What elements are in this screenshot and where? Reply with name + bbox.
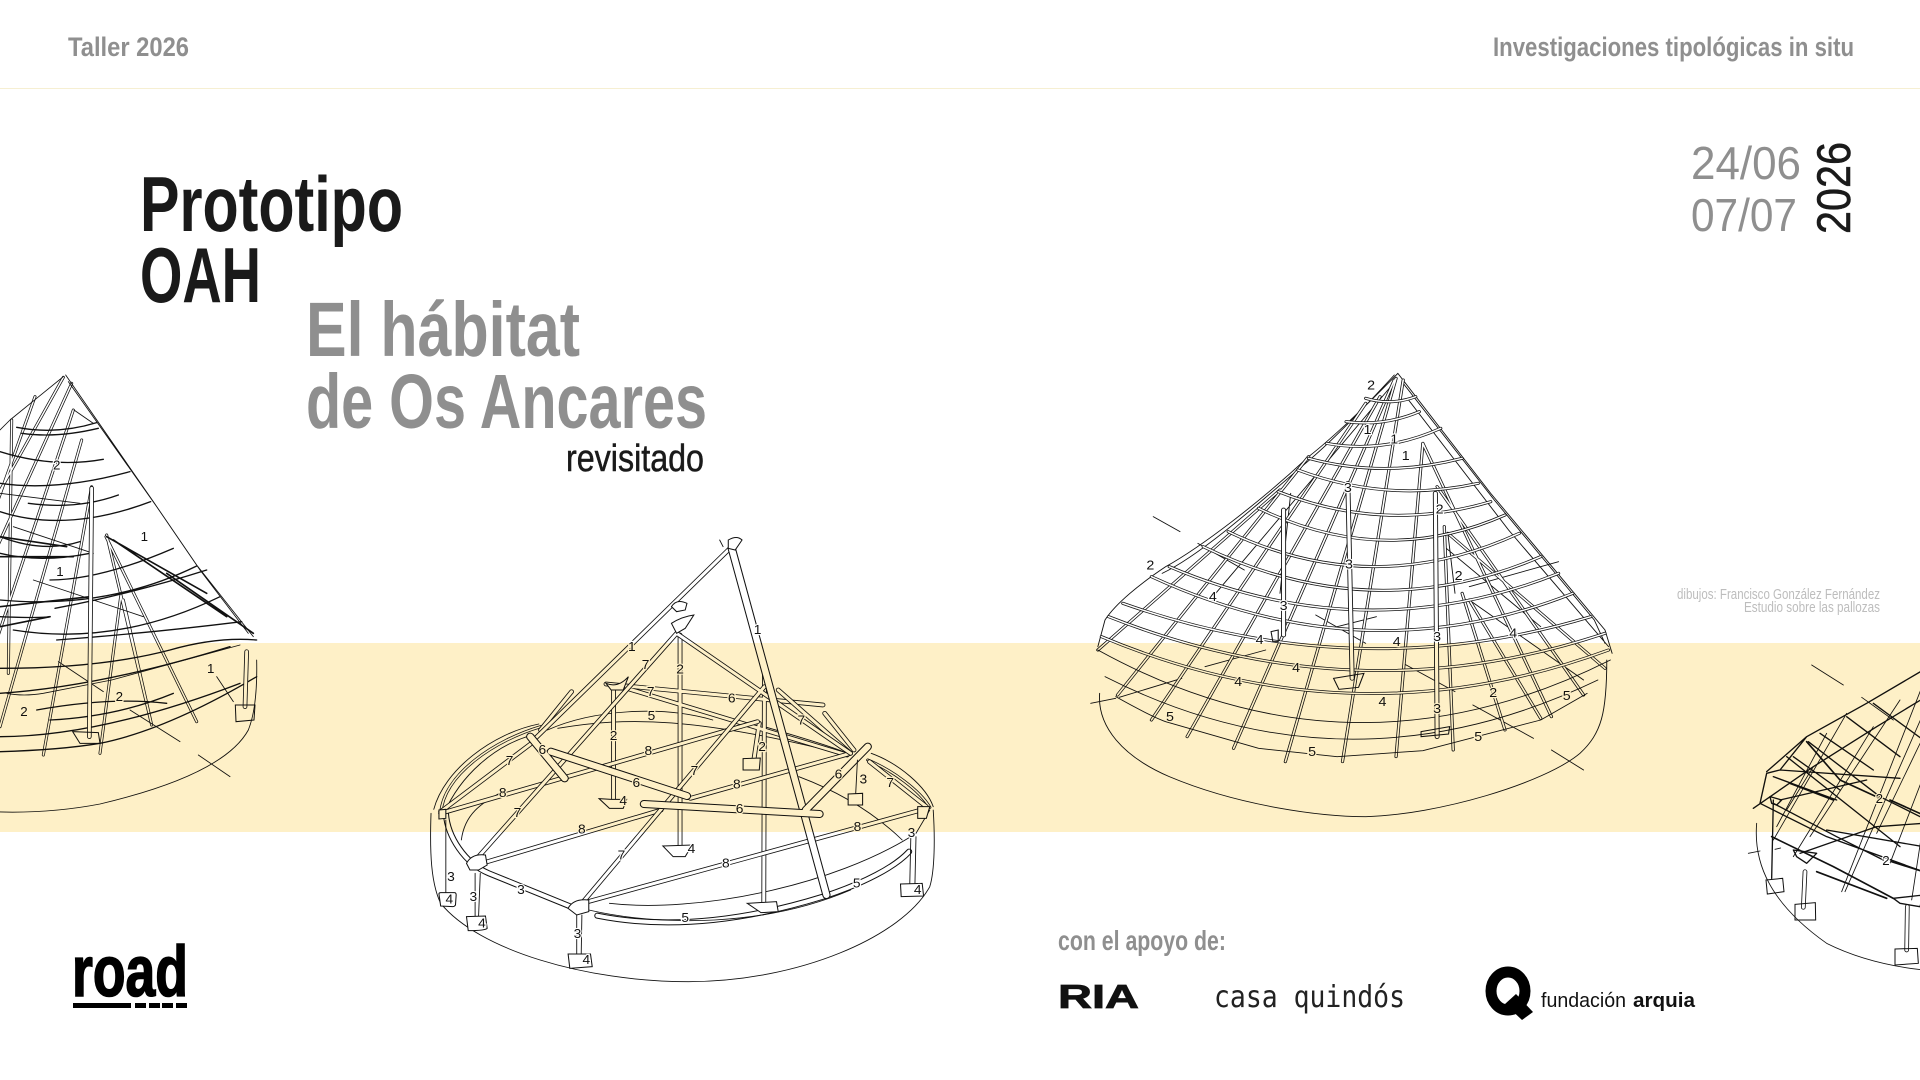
drawing: central open timber frame: 5	[853, 876, 861, 890]
title: Prototipo OAH: Prototipo	[140, 160, 403, 248]
drawing: right complete conical roof frame: 2	[1436, 501, 1444, 516]
drawing: right complete conical roof frame: 2	[1146, 557, 1154, 572]
drawing: central open timber frame: 6	[632, 775, 640, 790]
drawing: central open timber frame: 7	[618, 848, 625, 862]
drawing: far right cone, cropped at page edge: 2	[1876, 791, 1883, 806]
drawing: central open timber frame: 3	[908, 825, 915, 840]
drawing: central open timber frame: 2	[758, 739, 766, 754]
drawing credit: Estudio sobre las pallozas	[1744, 600, 1880, 616]
sponsor logo: fundación arquia: arquia	[1633, 990, 1696, 1012]
drawing: far right cone, cropped at page edge: 2	[1882, 853, 1890, 868]
drawing: central open timber frame: 8	[499, 785, 507, 800]
drawing: central open timber frame: 8	[722, 856, 730, 870]
drawing: central open timber frame: 8	[645, 743, 652, 758]
drawing: central open timber frame: 5	[648, 708, 655, 723]
sponsor logo: RIA: RIA	[1058, 978, 1139, 1015]
drawing: central open timber frame: 4	[478, 916, 486, 930]
subtitle: El hábitat de Os Ancares	[306, 287, 707, 445]
drawing: central open timber frame: 7	[506, 753, 513, 768]
drawing: right complete conical roof frame: 4	[1509, 625, 1518, 640]
drawing: right complete conical roof frame	[1091, 373, 1612, 817]
drawing: central open timber frame: 7	[691, 763, 698, 778]
drawing: central open timber frame: 2	[676, 662, 684, 676]
drawing: right complete conical roof frame: 2	[1489, 684, 1497, 700]
drawing: central open timber frame: 4	[914, 882, 922, 897]
drawing: right complete conical roof frame: 4	[1379, 694, 1387, 709]
drawing: left cone roof structure, cropped: 1	[56, 564, 64, 579]
drawing: central open timber frame: 3	[470, 889, 477, 904]
drawing: central open timber frame: 7	[797, 713, 805, 727]
drawing: central open timber frame: 4	[583, 952, 591, 967]
sponsor logo: fundación arquia	[1491, 972, 1696, 1020]
drawing: right complete conical roof frame: 5	[1166, 708, 1174, 724]
drawing: right complete conical roof frame: 3	[1433, 628, 1441, 644]
drawing credit	[1677, 587, 1880, 616]
drawing: right complete conical roof frame: 1	[1402, 448, 1410, 463]
drawing: right complete conical roof frame: 4	[1292, 659, 1300, 675]
drawing: central open timber frame: 4	[445, 892, 454, 906]
drawing: right complete conical roof frame: 2	[1455, 568, 1463, 583]
drawing: central open timber frame: 4	[619, 793, 628, 808]
drawing: right complete conical roof frame: 3	[1280, 598, 1288, 613]
drawing: central open timber frame	[431, 537, 934, 982]
drawing: right complete conical roof frame: 4	[1393, 634, 1401, 649]
vertical year: 2026	[1807, 142, 1860, 234]
drawing: right complete conical roof frame: 5	[1563, 688, 1571, 703]
drawing: central open timber frame: 3	[574, 926, 581, 941]
drawing: central open timber frame: 3	[517, 882, 525, 897]
drawing: central open timber frame: 3	[859, 772, 867, 786]
drawing: left cone roof structure, cropped	[0, 375, 257, 812]
drawing: right complete conical roof frame: 3	[1344, 479, 1352, 495]
subtitle: El hábitat de Os Ancares: de Os Ancares	[306, 359, 707, 445]
header: series label: Investigaciones tipológicas in situ	[1493, 32, 1854, 62]
dates	[1691, 137, 1801, 241]
logo: road: road	[72, 933, 188, 1012]
title: Prototipo OAH	[140, 160, 403, 319]
drawing: left cone roof structure, cropped: 1	[207, 661, 214, 676]
drawing: central open timber frame: 6	[728, 691, 736, 705]
drawing: central open timber frame: 8	[578, 822, 586, 836]
drawing: central open timber frame: 6	[835, 767, 842, 781]
drawing: right complete conical roof frame: 4	[1234, 674, 1243, 689]
drawing: left cone roof structure, cropped: 2	[20, 704, 28, 719]
drawing: right complete conical roof frame: 4	[1256, 632, 1264, 647]
drawing: central open timber frame: 7	[514, 805, 521, 820]
drawing: central open timber frame: 1	[628, 639, 636, 654]
drawing: left cone roof structure, cropped: 2	[53, 458, 60, 473]
drawing: right complete conical roof frame: 4	[1209, 588, 1217, 604]
drawing: central open timber frame: 8	[733, 777, 741, 791]
drawing: central open timber frame: 4	[688, 841, 696, 856]
header: workshop label: Taller 2026	[68, 32, 189, 62]
drawing: right complete conical roof frame: 5	[1474, 729, 1483, 744]
drawing: central open timber frame: 6	[538, 742, 546, 757]
sponsors heading: con el apoyo de:	[1058, 925, 1226, 956]
drawing: right complete conical roof frame: 3	[1345, 556, 1353, 571]
drawing: central open timber frame: 1	[754, 622, 761, 637]
drawing: central open timber frame: 5	[681, 910, 689, 925]
drawing: central open timber frame: 7	[642, 657, 649, 672]
sponsor logo: casa quindós: casa quindós	[1214, 980, 1405, 1015]
drawing: right complete conical roof frame: 1	[1390, 431, 1398, 446]
yellow horizontal band multiplied over the drawings	[0, 643, 1920, 832]
drawing: left cone roof structure, cropped: 2	[116, 689, 123, 704]
drawing: central open timber frame: 7	[886, 775, 894, 790]
drawing: right complete conical roof frame: 1	[1364, 422, 1371, 437]
drawing: central open timber frame: 8	[854, 819, 861, 834]
dates: 24/06	[1691, 137, 1801, 189]
header: rule	[0, 88, 1920, 89]
dates: 07/07	[1691, 189, 1797, 241]
drawing: right complete conical roof frame: 3	[1433, 700, 1441, 716]
drawing: right complete conical roof frame: 2	[1367, 377, 1375, 392]
drawing: left cone roof structure, cropped: 1	[141, 529, 148, 544]
drawing: far right cone, cropped at page edge	[1748, 665, 1920, 970]
drawing: central open timber frame: 6	[736, 801, 743, 816]
drawing: central open timber frame: 7	[647, 684, 655, 699]
title: Prototipo OAH: OAH	[140, 231, 261, 319]
drawing: central open timber frame: 3	[447, 869, 455, 884]
sponsor logo: fundación arquia: fundación	[1541, 990, 1626, 1012]
subtitle: revisitado: revisitado	[566, 438, 704, 480]
drawing: central open timber frame: 2	[610, 728, 617, 743]
drawing: right complete conical roof frame: 5	[1308, 743, 1316, 759]
subtitle: El hábitat de Os Ancares: El hábitat	[306, 287, 580, 373]
